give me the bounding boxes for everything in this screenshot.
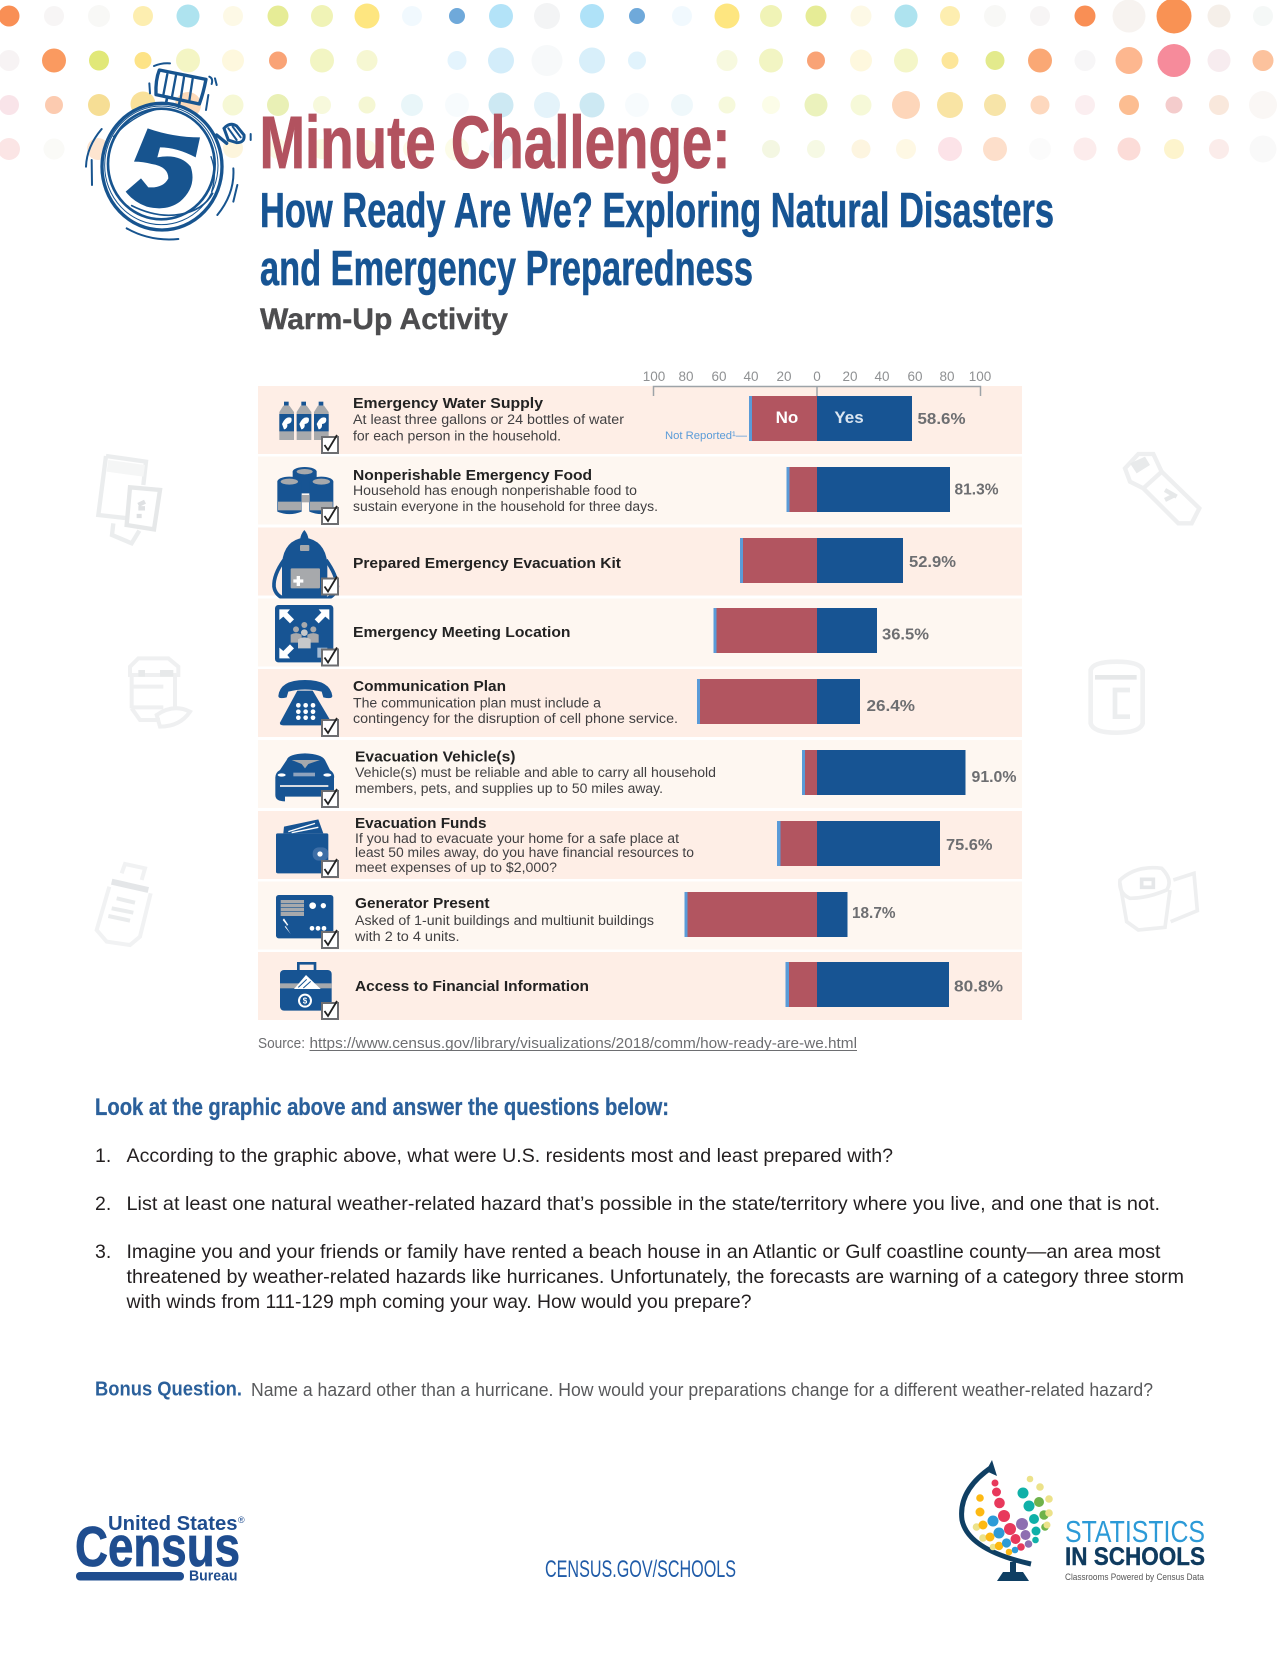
- label: Evacuation Vehicle(s): [355, 748, 516, 766]
- axis scale: 20: [842, 369, 858, 384]
- bars: [777, 821, 992, 866]
- logo: United States Census Bureau: Census: [75, 1515, 240, 1579]
- question 3: threatened by weather-related hazards like hurricanes. Unfortunately, the forecasts are warning of a category three storm: [126, 1266, 1184, 1288]
- axis scale: 20: [776, 369, 792, 384]
- label: Vehicle(s) must be reliable and able to carry all household: [355, 765, 716, 780]
- bonus question: Bonus Question.: [95, 1378, 242, 1400]
- icon: telephone: [278, 680, 332, 725]
- question 3: [95, 1241, 1184, 1313]
- label: Evacuation Funds: [355, 815, 486, 832]
- icon: wallet: [276, 819, 328, 873]
- icon: faded flashlight: [1125, 454, 1199, 523]
- label: [355, 815, 694, 875]
- label: Prepared Emergency Evacuation Kit: [353, 555, 621, 572]
- bars: 26.4%: [866, 698, 915, 715]
- label: [353, 395, 625, 444]
- bonus question: Name a hazard other than a hurricane. How would your preparations change for a different weather-related hazard?: [251, 1380, 1153, 1400]
- label: sustain everyone in the household for three days.: [353, 499, 658, 514]
- label: At least three gallons or 24 bottles of water: [353, 412, 625, 427]
- axis scale: 100: [643, 369, 665, 384]
- icon: checkbox: [322, 789, 338, 807]
- bars: [802, 750, 1016, 795]
- label: If you had to evacuate your home for a safe place at: [355, 831, 679, 846]
- bars: 52.9%: [909, 554, 956, 571]
- row: Emergency Meeting Location: [258, 598, 1022, 666]
- website link: CENSUS.GOV/SCHOOLS: [545, 1556, 736, 1583]
- logo: Statistics in Schools: STATISTICS: [1065, 1514, 1205, 1549]
- axis scale: 60: [907, 369, 923, 384]
- label: for each person in the household.: [353, 428, 561, 444]
- question 3: 3.: [95, 1241, 111, 1263]
- icon: car: [275, 753, 334, 801]
- bars: 81.3%: [954, 482, 998, 498]
- icon: checkbox: [322, 576, 338, 594]
- icon: checkbox: [322, 718, 338, 736]
- icon: generator: [276, 895, 333, 938]
- icon: checkbox: [322, 435, 338, 453]
- source line: Source:: [258, 1035, 305, 1052]
- label: least 50 miles away, do you have financial resources to: [355, 845, 694, 860]
- axis scale: 80: [939, 369, 955, 384]
- bars: No: [776, 408, 798, 427]
- bars: [697, 679, 915, 724]
- icon: checkbox: [322, 648, 338, 666]
- icon: stopwatch with number 5: [86, 63, 251, 239]
- icon: briefcase: [280, 963, 332, 1011]
- bars: Not Reported¹—: [665, 430, 747, 442]
- logo: Statistics in Schools: [962, 1460, 1205, 1583]
- label: Generator Present: [355, 895, 490, 912]
- logo: United States Census Bureau: Bureau: [189, 1568, 238, 1584]
- label: [353, 678, 678, 726]
- icon: checkbox: [322, 859, 338, 877]
- bars: [714, 608, 929, 653]
- icon: faded can: [1091, 662, 1143, 733]
- label: members, pets, and supplies up to 50 miles away.: [355, 781, 663, 796]
- row: Communication Plan: [258, 669, 1022, 737]
- logo: United States Census Bureau: ®: [238, 1515, 245, 1525]
- row: Evacuation Vehicle(s): [258, 740, 1022, 808]
- icon: checkbox: [322, 1001, 338, 1019]
- question 2: 2.: [95, 1193, 111, 1215]
- bars: 18.7%: [852, 905, 896, 922]
- label: contingency for the disruption of cell phone service.: [353, 711, 678, 726]
- bars: [786, 467, 998, 512]
- bars: 75.6%: [946, 837, 992, 854]
- chart: preparedness bars: [258, 369, 1022, 1020]
- label: Access to Financial Information: [355, 978, 589, 995]
- question 3: with winds from 111-129 mph coming your way. How would you prepare?: [126, 1291, 752, 1313]
- logo: Statistics in Schools: IN SCHOOLS: [1065, 1543, 1205, 1571]
- label: [353, 467, 658, 514]
- axis scale: 60: [711, 369, 727, 384]
- icon: checkbox: [322, 506, 338, 524]
- bars: 91.0%: [972, 769, 1016, 786]
- axis scale: 100: [969, 369, 991, 384]
- bars: 80.8%: [954, 978, 1003, 996]
- background dot pattern: [0, 0, 1277, 162]
- bars: 36.5%: [882, 626, 929, 644]
- bars: 58.6%: [918, 411, 966, 428]
- label: Emergency Meeting Location: [353, 624, 570, 641]
- row: Nonperishable Emergency Food: [258, 456, 1022, 524]
- bars: Yes: [834, 408, 864, 427]
- question 3: Imagine you and your friends or family have rented a beach house in an Atlantic or Gulf coastline county—an area most: [126, 1241, 1161, 1263]
- label: with 2 to 4 units.: [354, 929, 460, 944]
- icon: water bottles: [279, 402, 329, 440]
- question 1: 1.: [95, 1145, 111, 1167]
- source line: https://www.census.gov/library/visualizations/2018/comm/how-ready-are-we.html: [310, 1035, 857, 1052]
- subtitle: How Ready Are We: and Emergency Preparedness: [260, 242, 753, 296]
- bars: [786, 962, 1003, 1007]
- row: Emergency Water Supply: [258, 386, 1022, 454]
- title: Minute Challenge: Minute Challenge:: [260, 101, 730, 184]
- label: The communication plan must include a: [353, 696, 602, 710]
- icon: globe: [962, 1460, 1053, 1581]
- label: Asked of 1-unit buildings and multiunit buildings: [355, 913, 654, 928]
- axis scale: 40: [743, 369, 759, 384]
- icon: meeting point sign: [275, 605, 333, 662]
- axis scale: 80: [678, 369, 694, 384]
- axis scale: 0: [813, 369, 821, 384]
- icon: faded bottle: [97, 864, 151, 945]
- icon: faded jar: [130, 658, 190, 727]
- label: Nonperishable Emergency Food: [353, 467, 592, 484]
- label: [355, 748, 716, 796]
- icon: faded phone and tablet: [98, 456, 160, 543]
- icon: backpack: [274, 530, 337, 599]
- label: Emergency Water Supply: [353, 395, 544, 412]
- row: Prepared Emergency Evacuation Kit: [258, 528, 1022, 599]
- row: Evacuation Funds: [258, 811, 1022, 879]
- logo: Statistics in Schools: Classrooms Powered by Census Data: [1065, 1572, 1205, 1583]
- bars: [684, 892, 896, 937]
- row: Generator Present: [258, 882, 1022, 950]
- heading: questions: Look at the graphic above and answer the questions below:: [95, 1094, 669, 1121]
- question 1: According to the graphic above, what were U.S. residents most and least prepared with?: [126, 1145, 893, 1167]
- subtitle: How Ready Are We: [260, 184, 1054, 296]
- label: [354, 895, 654, 944]
- question 2: List at least one natural weather-related hazard that’s possible in the state/territory where you live, and one that is not.: [126, 1193, 1160, 1215]
- bars: [665, 396, 966, 442]
- label: Household has enough nonperishable food to: [353, 483, 637, 498]
- heading: Warm-Up Activity: Warm-Up Activity: [260, 303, 508, 336]
- icon: faded toilet paper roll: [1120, 868, 1197, 930]
- logo: United States Census Bureau: United States: [108, 1513, 238, 1535]
- label: meet expenses of up to $2,000?: [355, 860, 557, 875]
- icon: briefcase: $: [303, 997, 308, 1006]
- bars: [740, 538, 956, 583]
- label: Communication Plan: [353, 678, 506, 695]
- row: Access to Financial Information: [258, 952, 1022, 1020]
- axis scale: 40: [874, 369, 890, 384]
- icon: food cans: [277, 467, 333, 514]
- icon: checkbox: [322, 930, 338, 948]
- axis scale: [643, 369, 991, 396]
